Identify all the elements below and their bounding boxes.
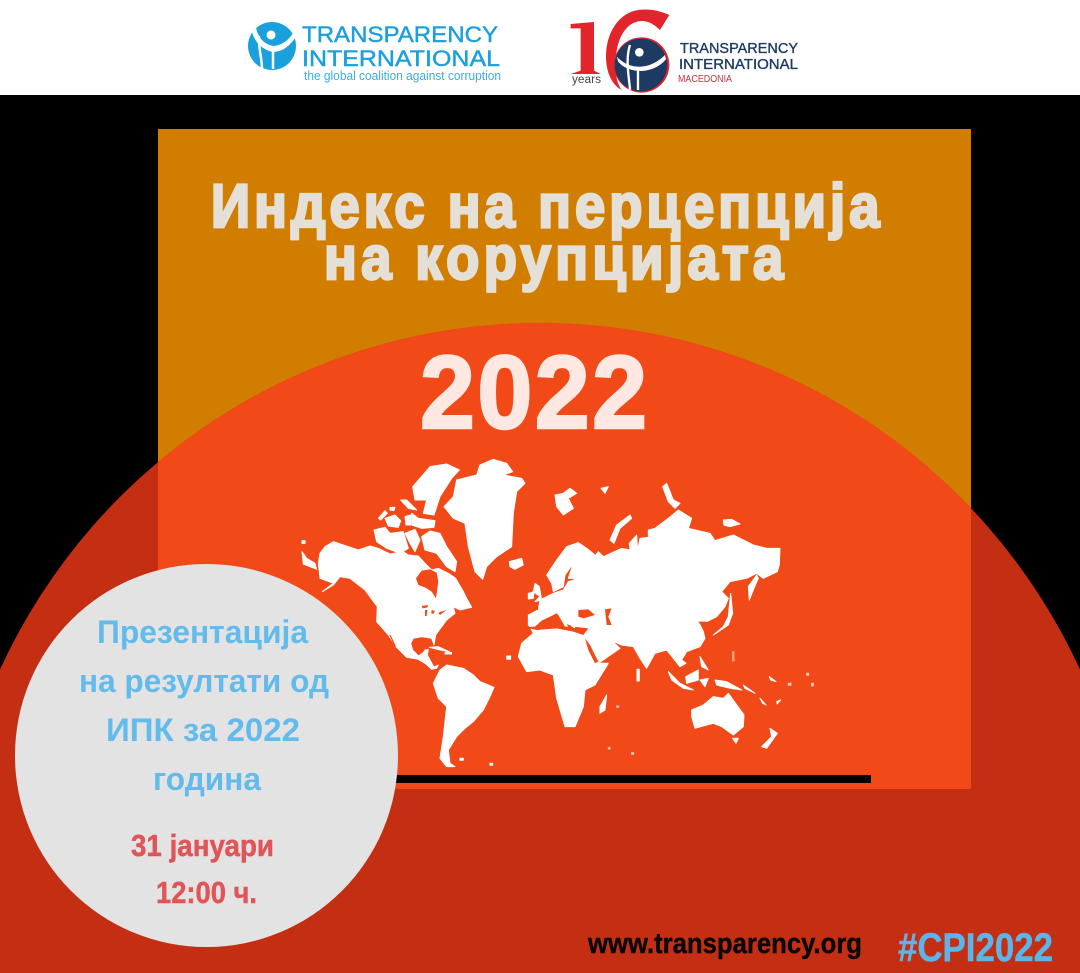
logo: TI Macedonia 10 years <box>571 9 798 93</box>
logo: Transparency International <box>248 22 501 83</box>
callout heading: година <box>153 761 261 797</box>
title: на корупцијата <box>324 225 784 293</box>
Hudson Bay <box>416 569 438 598</box>
Italy and Greece <box>558 615 576 628</box>
Americas and Arctic <box>302 459 542 767</box>
world map <box>302 459 813 767</box>
website url: www.transparency.org <box>587 928 862 960</box>
callout heading: на резултати од <box>79 663 329 699</box>
Gulf of California <box>389 635 396 647</box>
logo text: INTERNATIONAL <box>302 46 500 71</box>
hashtag: #CPI2022 <box>898 926 1053 970</box>
callout date and time: 12:00 ч. <box>156 875 257 910</box>
callout date and time: 31 јануари <box>131 828 274 863</box>
header: logo band <box>0 0 1080 95</box>
icon: TI globe <box>248 22 296 70</box>
callout date and time <box>131 828 274 910</box>
logo text: TI Macedonia <box>678 41 798 85</box>
logo text: TI Macedonia: MACEDONIA <box>678 74 732 85</box>
callout: grey circle <box>15 564 398 947</box>
Eurasia, Africa, Oceania <box>518 483 813 754</box>
black baseline bar <box>390 775 871 783</box>
Great Lakes <box>422 605 447 616</box>
title: Индекс на перцепција <box>211 173 880 241</box>
callout heading: Презентација <box>97 614 308 650</box>
logo tagline: the global coalition against corruption <box>304 69 501 83</box>
callout heading: ИПК за 2022 <box>106 712 300 748</box>
semicircle overlap on panel <box>158 323 971 789</box>
logo text: TI Macedonia: TRANSPARENCY <box>680 41 798 57</box>
panel: orange rectangle <box>158 129 971 789</box>
callout heading <box>79 614 329 797</box>
icon: anniversary 10 <box>571 9 669 93</box>
logo text: TRANSPARENCY <box>302 22 498 47</box>
seas <box>525 613 588 635</box>
big red semicircle <box>0 323 1080 973</box>
logo text <box>302 22 500 71</box>
year 2022: 2022 <box>420 335 647 451</box>
label: years: years <box>572 74 601 86</box>
logo text: TI Macedonia: INTERNATIONAL <box>679 57 798 73</box>
title <box>211 173 880 293</box>
